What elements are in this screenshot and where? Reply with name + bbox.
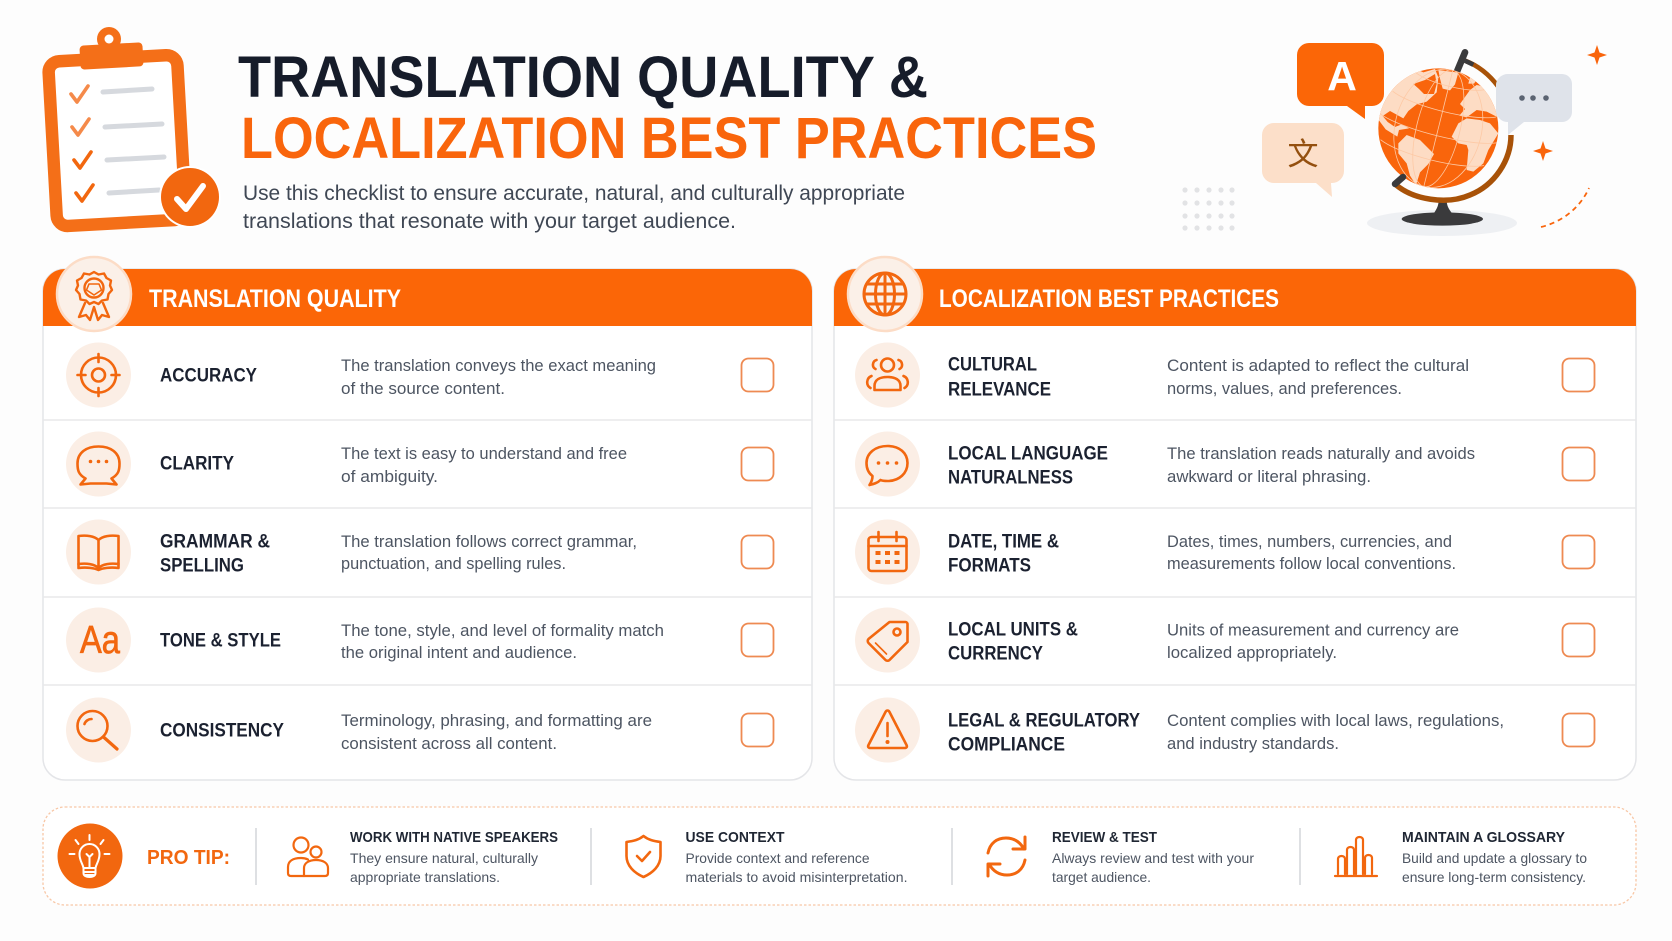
tip: maintain a glossary: ensure long-term consistency. xyxy=(1402,869,1586,885)
row: consistency: Terminology, phrasing, and formatting are xyxy=(341,711,652,730)
icon: grey speech bubble with dots xyxy=(1496,74,1572,135)
row: local language naturalness xyxy=(855,432,1594,496)
row: consistency: CONSISTENCY xyxy=(160,720,284,742)
row: legal and regulatory compliance: COMPLIANCE xyxy=(948,734,1065,756)
row: accuracy: of the source content. xyxy=(341,379,505,398)
row: clarity: The text is easy to understand and free xyxy=(341,444,627,463)
decorative dot grid xyxy=(1182,187,1235,231)
row: accuracy: The translation conveys the exact meaning xyxy=(341,356,656,375)
icon: speech bubble with letter A: A xyxy=(1327,53,1357,99)
icon: speech bubble with Chinese character xyxy=(1262,123,1344,197)
icon: price tag xyxy=(868,622,908,661)
icon: light bulb xyxy=(58,824,122,888)
illustration: globe on stand xyxy=(1366,52,1517,236)
decorative dashed curve xyxy=(1541,188,1589,227)
subtitle xyxy=(243,182,905,233)
heading: LOCALIZATION BEST PRACTICES xyxy=(939,285,1279,313)
row: cultural relevance: Content is adapted to reflect the cultural xyxy=(1167,356,1469,375)
row: clarity xyxy=(66,432,774,496)
title: LOCALIZATION BEST PRACTICES xyxy=(241,106,1097,171)
globe stand lower arc xyxy=(1395,135,1511,200)
row: tone and style: TONE & STYLE xyxy=(160,630,281,652)
icon: chat bubble xyxy=(78,446,120,484)
row: legal and regulatory compliance xyxy=(855,698,1594,762)
tip: review and test: target audience. xyxy=(1052,869,1151,885)
icon: warning triangle xyxy=(868,710,907,748)
icon: magnifier xyxy=(78,711,117,749)
tip: use context: USE CONTEXT xyxy=(686,829,784,846)
row: grammar and spelling: punctuation, and spelling rules. xyxy=(341,554,566,573)
title xyxy=(238,45,1097,171)
heading: TRANSLATION QUALITY xyxy=(149,285,401,313)
tip: maintain a glossary: Build and update a glossary to xyxy=(1402,850,1587,866)
row: cultural relevance: RELEVANCE xyxy=(948,380,1051,400)
icon: refresh arrows xyxy=(988,837,1025,876)
icon: people xyxy=(288,838,328,876)
panel: localization best practices xyxy=(834,257,1636,780)
subtitle: Use this checklist to ensure accurate, natural, and culturally appropriate xyxy=(243,182,905,205)
icon: globe badge xyxy=(848,257,922,331)
row: legal and regulatory compliance: LEGAL & REGULATORY xyxy=(948,710,1140,732)
row: cultural relevance xyxy=(855,342,1594,408)
title: TRANSLATION QUALITY & xyxy=(238,45,928,110)
tip: work with native speakers: appropriate translations. xyxy=(350,869,500,885)
row: local language naturalness: LOCAL LANGUAGE xyxy=(948,444,1108,464)
row: local units and currency: Units of measurement and currency are xyxy=(1167,620,1459,640)
icon: open book xyxy=(78,536,118,570)
row: local language naturalness: The translation reads naturally and avoids xyxy=(1167,444,1475,463)
row: local units and currency: localized appropriately. xyxy=(1167,643,1337,662)
row: accuracy: ACCURACY xyxy=(160,366,257,386)
icon: Aa letters: Aa xyxy=(80,619,120,662)
row: local language naturalness: NATURALNESS xyxy=(948,468,1073,488)
row: local units and currency: LOCAL UNITS & xyxy=(948,620,1078,640)
tip: review and test: REVIEW & TEST xyxy=(1052,829,1157,846)
panel: translation quality xyxy=(43,257,812,780)
row: legal and regulatory compliance: Content complies with local laws, regulations, xyxy=(1167,711,1504,730)
icon: sparkle top xyxy=(1587,45,1607,65)
row: tone and style: the original intent and audience. xyxy=(341,643,577,662)
panel header bar xyxy=(43,269,812,326)
icon: sparkle lower xyxy=(1533,141,1553,161)
pro tip label: PRO TIP: xyxy=(147,847,230,869)
icon: shield check xyxy=(626,836,660,877)
row: date time and formats: measurements follow local conventions. xyxy=(1167,554,1456,573)
panel header bar xyxy=(834,269,1636,326)
row: tone and style xyxy=(66,608,774,672)
tip: review and test xyxy=(988,829,1254,885)
row: cultural relevance: norms, values, and preferences. xyxy=(1167,379,1402,398)
row: tone and style: The tone, style, and level of formality match xyxy=(341,621,664,640)
row: cultural relevance: CULTURAL xyxy=(948,354,1037,376)
row: grammar and spelling: SPELLING xyxy=(160,556,244,576)
tip: work with native speakers xyxy=(288,829,558,885)
row: clarity: CLARITY xyxy=(160,454,234,474)
row: accuracy xyxy=(66,342,774,408)
row: date time and formats: FORMATS xyxy=(948,556,1031,576)
row: legal and regulatory compliance: and industry standards. xyxy=(1167,734,1339,753)
icon: chat bubble xyxy=(866,446,908,485)
row: local units and currency: CURRENCY xyxy=(948,644,1043,664)
icon: group of people xyxy=(867,358,908,390)
tip: use context: Provide context and reference xyxy=(686,850,870,866)
icon: award badge xyxy=(57,257,131,331)
tip: maintain a glossary xyxy=(1335,829,1587,885)
icon: speech bubble with letter A xyxy=(1297,43,1384,119)
tip: use context: materials to avoid misinterpretation. xyxy=(686,869,908,885)
icon: clipboard checklist xyxy=(48,27,221,228)
row: grammar and spelling: GRAMMAR & xyxy=(160,532,270,552)
row: clarity: of ambiguity. xyxy=(341,467,438,486)
row: consistency: consistent across all content. xyxy=(341,734,557,753)
row: grammar and spelling xyxy=(66,520,774,584)
tip: work with native speakers: They ensure natural, culturally xyxy=(350,850,538,866)
tip: review and test: Always review and test with your xyxy=(1052,850,1254,866)
panel: pro tip xyxy=(43,807,1636,905)
icon: calendar xyxy=(868,532,906,571)
row: date time and formats: Dates, times, numbers, currencies, and xyxy=(1167,532,1452,551)
row: grammar and spelling: The translation follows correct grammar, xyxy=(341,532,637,551)
row: consistency xyxy=(66,698,774,762)
icon: speech bubble with Chinese character: 文 xyxy=(1288,129,1318,174)
row: local language naturalness: awkward or literal phrasing. xyxy=(1167,467,1371,486)
row: date time and formats: DATE, TIME & xyxy=(948,532,1059,552)
tip: maintain a glossary: MAINTAIN A GLOSSARY xyxy=(1402,829,1565,846)
icon: target xyxy=(78,354,120,396)
row: date time and formats xyxy=(855,520,1594,584)
tip: use context xyxy=(626,829,908,885)
row: local units and currency xyxy=(855,608,1594,672)
subtitle: translations that resonate with your target audience. xyxy=(243,210,736,233)
tip: work with native speakers: WORK WITH NATIVE SPEAKERS xyxy=(350,829,558,846)
icon: bar chart xyxy=(1335,837,1377,876)
